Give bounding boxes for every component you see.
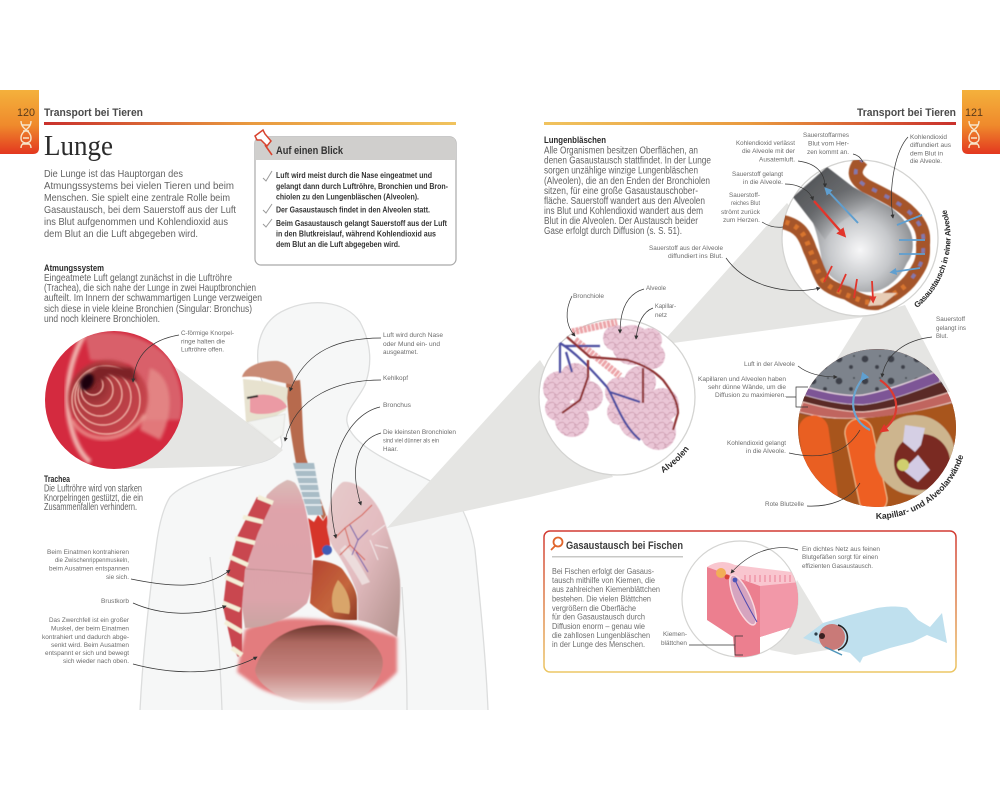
text block: Kiemen: bestehen. Die vielen Blättchen <box>552 594 651 604</box>
magnifier wedge: alveole <box>660 203 880 345</box>
label: dichtes Netz: Blutgefäßen sorgt für einen <box>802 554 878 561</box>
label: Sauerstoff gelangt: Sauerstoff gelangt <box>732 171 783 178</box>
ribs <box>223 497 273 657</box>
label: Sauerstoff diffundiert: Sauerstoff aus der Alveole <box>649 245 723 252</box>
label: C-förmige Knorpelringe: Luftröhre offen. <box>181 346 224 354</box>
text block: Lungenbläschen: ins Blut und Kohlendioxid wandert aus dem <box>544 206 703 217</box>
label: Kapillaren und Alveolen <box>698 376 808 407</box>
label: Kapillaren und Alveolen: sehr dünne Wände, um die <box>708 384 786 391</box>
diaphragm <box>237 618 397 705</box>
label: Kiemenblättchen <box>661 631 743 655</box>
text block: Atmungssystem <box>44 263 262 325</box>
text block: Atmungssystem: Eingeatmete Luft gelangt zunächst in die Luftröhre <box>44 273 232 284</box>
illustration: respiratory anatomy <box>223 361 400 705</box>
label: Kohlendioxid verlässt: Kohlendioxid verlässt <box>736 140 795 147</box>
text block: Trachea: Die Luftröhre wird von starken <box>44 484 142 494</box>
text block: intro: ins Blut aufgenommen und Kohlendioxid aus <box>44 216 228 228</box>
text block: intro <box>44 168 236 240</box>
label: Sauerstoffreiches Blut: Sauerstoff- <box>729 192 760 199</box>
label: Kohlendioxid verlässt <box>736 140 825 187</box>
header: Transport bei Tieren right: Transport bei Tieren <box>857 107 956 119</box>
label: Kapillarnetz: netz <box>655 312 667 319</box>
label: Zwerchfell <box>42 617 257 672</box>
label: Kapillaren und Alveolen: Diffusion zu maximieren. <box>715 392 786 399</box>
label: Nase oder Mund: ausgeatmet. <box>383 349 418 356</box>
text block: Kiemen: die zahllosen Lungenbläschen <box>552 631 650 640</box>
label: Zwerchfell: Das Zwerchfell ist ein großer <box>49 617 130 624</box>
capillary wall <box>783 160 923 303</box>
alveoli clusters <box>543 325 679 450</box>
label: Kiemenblättchen: Kiemen- <box>663 631 687 638</box>
text block: Kiemen: Bei Fischen erfolgt der Gasaus- <box>552 567 654 576</box>
arrow: red O2 <box>880 380 896 430</box>
icon: magnifier <box>551 538 562 550</box>
label: Sauerstoffarmes Blut: Sauerstoffarmes <box>803 132 850 139</box>
alveoli magnified circle <box>539 319 695 475</box>
text block: Atmungssystem: (Trachea), die sich nahe der Lunge in zwei Hauptbronchien <box>44 283 256 294</box>
text block: Kiemen <box>552 567 660 649</box>
label: Zwerchfell: Muskel, der beim Einatmen <box>51 626 129 632</box>
label: Kohlendioxid verlässt: Ausatemluft. <box>759 156 795 164</box>
label: Sauerstoffreiches Blut <box>721 192 783 227</box>
label: Zwerchfell: senkt wird. Beim Ausatmen <box>51 642 129 649</box>
label: Sauerstoffreiches Blut: zum Herzen. <box>723 217 760 224</box>
label: C-förmige Knorpelringe: ringe halten die <box>181 338 225 346</box>
right lung with bronchi <box>327 482 400 637</box>
blood vessels <box>560 343 640 440</box>
magnifier wedge: walls <box>830 305 950 392</box>
label: Sauerstoffarmes Blut: Blut vom Her- <box>808 140 849 148</box>
label: Zwischenrippenmuskeln: die Zwischenrippenmuskeln, <box>55 557 129 564</box>
label: Bronchiole <box>567 293 604 336</box>
text block: Trachea <box>44 474 143 513</box>
label: Luft in der Alveole <box>744 361 837 377</box>
label: Bronchus: Bronchus <box>383 402 412 409</box>
text block: Kiemen: in der Lunge des Menschen. <box>552 640 645 649</box>
label: Kehlkopf <box>285 375 408 441</box>
gill circle <box>682 541 800 660</box>
body silhouette <box>140 303 488 710</box>
arrow: blue CO2 <box>853 378 870 430</box>
text block: intro: dem Blut an die Luft abgegeben wird. <box>44 228 198 240</box>
label: Sauerstoff diffundiert: diffundiert ins Blut. <box>668 253 723 260</box>
text block: Lungenbläschen: sitzen, für eine große Gasaustauschober- <box>544 186 698 197</box>
label: Sauerstoff gelangt ins Blut: Sauerstoff <box>936 316 965 323</box>
label: Bronchiole: Bronchiole <box>573 293 604 300</box>
label: Kapillarnetz: Kapillar- <box>655 303 676 310</box>
page tab: page 121 <box>962 90 1000 154</box>
text block: Lungenbläschen <box>544 135 711 237</box>
text block: Trachea: Knorpelringen gestützt, die ein <box>44 493 143 504</box>
icon: pin <box>255 130 272 155</box>
text block: Lungenbläschen: denen Gasaustausch stattfindet. In der Lunge <box>544 156 711 166</box>
title: Lunge: Lunge <box>44 130 113 162</box>
label: Kohlendioxid gelangt: in die Alveole. <box>746 448 786 455</box>
label: Kapillaren und Alveolen: Kapillaren und Alveolen haben <box>698 376 786 383</box>
panel: Gasaustausch bei Fischen <box>544 531 956 672</box>
text block: Lungenbläschen: Blut in die Alveolen. Der Austausch beider <box>544 216 699 227</box>
magnifier wedge: trachea <box>123 363 283 469</box>
text block: intro: Gasaustausch, bei dem Sauerstoff aus der Luft <box>44 204 236 216</box>
label: Rote Blutzelle: Rote Blutzelle <box>765 501 804 508</box>
arrow: blue CO2 out <box>827 190 858 223</box>
label: Kohlendioxid diffundiert <box>891 134 952 218</box>
label: kleinste Bronchiolen: Haar. <box>383 446 398 453</box>
text block: Atmungssystem: und noch kleinere Bronchiolen. <box>44 314 160 325</box>
label: dichtes Netz: Ein dichtes Netz aus feinen <box>802 546 880 553</box>
label: Zwischenrippenmuskeln <box>47 549 230 585</box>
cell with crystals <box>875 415 955 495</box>
label: kleinste Bronchiolen: Die kleinsten Bronchiolen <box>383 429 456 436</box>
label: Bronchus <box>331 402 412 538</box>
checklist: dem Blut an die Luft abgegeben wird. <box>276 240 400 249</box>
label: Brustkorb: Brustkorb <box>101 598 129 605</box>
page tab: page 120 <box>0 90 39 154</box>
label: Sauerstoffarmes Blut <box>803 132 863 162</box>
label: Sauerstoff gelangt ins Blut <box>882 316 967 377</box>
capillary wall magnified circle <box>797 349 960 516</box>
trachea <box>286 380 326 520</box>
dark gap <box>803 382 950 412</box>
text block: Lungenbläschen: Lungenbläschen <box>544 135 606 146</box>
label: Luft in der Alveole: Luft in der Alveole <box>744 361 795 368</box>
label: Sauerstoff gelangt ins Blut: gelangt ins <box>936 325 967 332</box>
icon: fish <box>803 606 947 663</box>
label: Sauerstoff diffundiert <box>649 245 820 291</box>
red blood cells <box>798 414 838 496</box>
heart and vessels <box>308 515 357 620</box>
checklist: chiolen zu den Lungenbläschen (Alveolen). <box>276 192 419 202</box>
label: Sauerstoff gelangt: in die Alveole. <box>743 179 783 186</box>
text block: Atmungssystem: aufteilt. Im Innern der schwammartigen Lunge verzweigen <box>44 293 262 304</box>
text block: Kiemen: tausch mithilfe von Kiemen, die <box>552 576 656 585</box>
trachea magnified circle <box>45 331 183 469</box>
text block: Lungenbläschen: fläche. Sauerstoff wandert aus den Alveolen <box>544 196 705 207</box>
label: Kohlendioxid verlässt: die Alveole mit der <box>742 148 796 155</box>
icon: DNA left <box>21 121 31 148</box>
text block: Lungenbläschen: sorgen unzählige winzige Lungenbläschen <box>544 166 698 176</box>
label: Kohlendioxid gelangt: Kohlendioxid gelangt <box>727 440 786 447</box>
label: Kiemenblättchen: blättchen <box>661 640 687 647</box>
label: Kohlendioxid diffundiert: Kohlendioxid <box>910 134 947 141</box>
checklist: Luft wird meist durch die Nase eingeatmet und <box>276 171 432 180</box>
caption: Kapillar- und Alveolarwände: Kapillar- und Alveolarwände <box>876 455 963 520</box>
text block: Lungenbläschen: Alle Organismen besitzen Oberflächen, an <box>544 146 698 156</box>
label: Sauerstoffreiches Blut: reiches Blut <box>731 200 760 207</box>
text block: Trachea: Trachea <box>44 474 71 485</box>
header: Transport bei Tieren left <box>44 107 456 125</box>
label: kleinste Bronchiolen <box>356 429 456 505</box>
alveole magnified circle <box>782 160 938 316</box>
arrows: red diffusion <box>824 266 873 300</box>
label: Zwischenrippenmuskeln: beim Ausatmen entspannen <box>49 566 129 572</box>
capillary wall <box>799 392 956 419</box>
label: Alveole: Alveole <box>646 285 666 292</box>
label: dichtes Netz <box>731 546 880 573</box>
label: Kehlkopf: Kehlkopf <box>383 375 408 382</box>
checklist: Der Gasaustausch findet in den Alveolen statt. <box>276 206 430 214</box>
bronchiole tube <box>572 322 620 376</box>
label: Zwerchfell: kontrahiert und dadurch abge- <box>42 634 129 641</box>
label: Zwerchfell: sich wieder nach oben. <box>63 658 129 665</box>
text block: Kiemen: Diffusion enorm – genau wie <box>552 622 646 631</box>
label: Sauerstoffreiches Blut: strömt zurück <box>721 209 761 216</box>
label: Nase oder Mund <box>290 332 443 391</box>
header: Transport bei Tieren left: Transport bei Tieren <box>44 107 143 119</box>
label: C-förmige Knorpelringe: C-förmige Knorpel- <box>181 330 234 337</box>
alveolar wall <box>803 370 940 405</box>
label: kleinste Bronchiolen: sind viel dünner als ein <box>383 438 439 444</box>
page number 120: 120 <box>17 107 35 119</box>
panel: Auf einen Blick <box>255 130 456 265</box>
checklist: gelangt dann durch Luftröhre, Bronchien und Bron- <box>276 182 448 191</box>
label: Kohlendioxid diffundiert: diffundiert aus <box>910 142 952 149</box>
magnifier wedge: alveoli <box>387 360 613 528</box>
label: Brustkorb <box>101 598 226 613</box>
label: Zwerchfell: entspannt er sich und bewegt <box>45 650 129 657</box>
arrows: blue diffusion <box>893 215 925 272</box>
text block: Trachea: Zusammenfallen verhindern. <box>44 502 137 513</box>
label: Zwischenrippenmuskeln: Beim Einatmen kontrahieren <box>47 549 129 556</box>
checklist <box>263 171 448 249</box>
left lung <box>242 480 312 628</box>
label: C-förmige Knorpelringe <box>133 330 234 382</box>
label: Kohlendioxid diffundiert: die Alveole. <box>910 158 942 165</box>
label: Alveole <box>620 285 666 333</box>
text block: Atmungssystem: sich diese in viele kleine Bronchien (Singular: Bronchus) <box>44 304 252 315</box>
text block: Kiemen: für den Gasaustausch durch <box>552 612 645 622</box>
heading: Gasaustausch bei Fischen: Gasaustausch bei Fischen <box>566 540 683 552</box>
label: Kohlendioxid diffundiert: dem Blut in <box>910 150 943 158</box>
header: Transport bei Tieren right <box>544 107 956 125</box>
label: dichtes Netz: effizienten Gasaustausch. <box>802 563 873 570</box>
caption: Alveolen: Alveolen <box>662 447 689 473</box>
heading: Auf einen Blick: Auf einen Blick <box>276 145 344 157</box>
label: Sauerstoff gelangt ins Blut: Blut. <box>936 333 948 340</box>
blood background <box>798 401 960 510</box>
text block: intro: Menschen. Sie spielt eine zentrale Rolle beim <box>44 192 230 204</box>
arrow: red oxygen in <box>814 201 843 234</box>
head cross-section <box>242 361 294 442</box>
caption: Gasaustausch in einer Alveole: Gasaustausch in einer Alveole <box>914 210 951 307</box>
air sac <box>793 167 913 292</box>
label: Kapillarnetz <box>636 303 676 339</box>
text block: Lungenbläschen: Gase erfolgt durch Diffusion (s. S. 51). <box>544 226 682 237</box>
text block: Kiemen: aus zahlreichen Kiemenblättchen <box>552 585 660 594</box>
text block: Lungenbläschen: (Alveolen), die an den Enden der Bronchiolen <box>544 176 710 187</box>
label: Sauerstoffarmes Blut: zen kommt an. <box>807 149 849 156</box>
label: Kohlendioxid gelangt <box>727 430 860 456</box>
label: Sauerstoff gelangt <box>732 171 813 200</box>
label: Rote Blutzelle <box>765 483 860 508</box>
text block: Atmungssystem: Atmungssystem <box>44 263 104 274</box>
magnifier wedge: fish gill <box>770 580 840 655</box>
checklist: Beim Gasaustausch gelangt Sauerstoff aus der Luft <box>276 219 447 228</box>
text block: intro: Atmungssystems bei vielen Tieren und beim <box>44 180 234 192</box>
page number 121: 121 <box>965 107 983 119</box>
label: Nase oder Mund: oder Mund ein- und <box>383 341 440 348</box>
label: Zwischenrippenmuskeln: sie sich. <box>106 574 129 581</box>
text block: Kiemen: vergrößern die Oberfläche <box>552 604 636 613</box>
icon: DNA right <box>969 121 979 148</box>
checklist: in den Blutkreislauf, während Kohlendioxid aus <box>276 230 436 238</box>
text block: intro: Die Lunge ist das Hauptorgan des <box>44 168 183 180</box>
label: Nase oder Mund: Luft wird durch Nase <box>383 332 443 339</box>
